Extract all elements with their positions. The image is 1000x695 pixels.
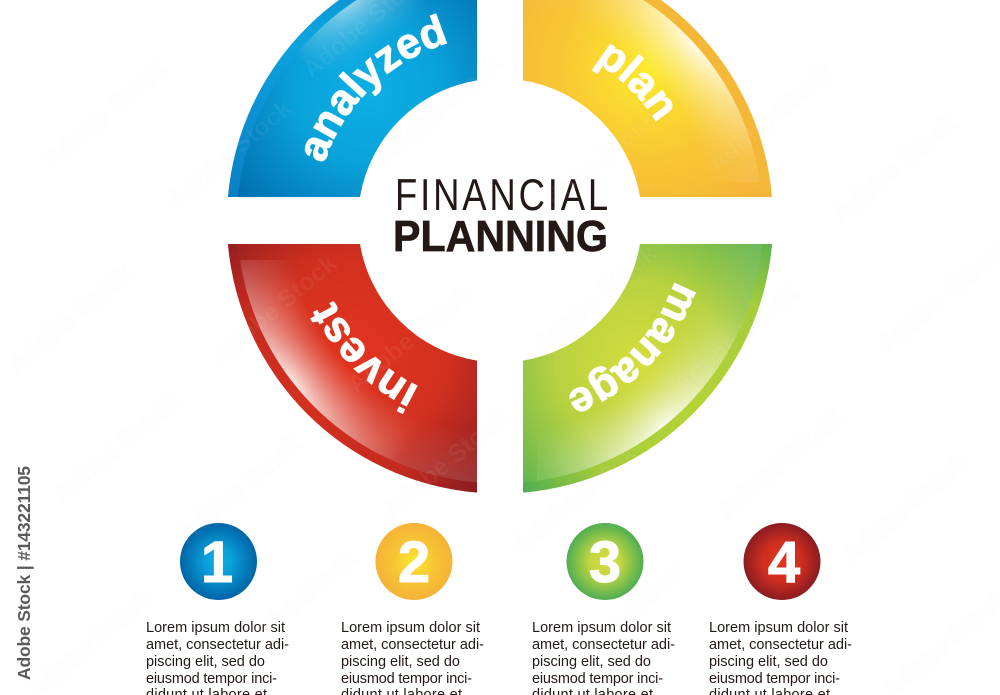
watermark: stock pattern: Adobe Stock (827, 109, 962, 229)
panel: invest segment (228, 244, 477, 492)
watermark: stock pattern: Adobe Stock (667, 279, 802, 399)
title (393, 170, 608, 261)
watermark: stock pattern: Adobe Stock (162, 94, 297, 214)
text block: step 1: eiusmod tempor inci- (146, 671, 277, 687)
label: plan: plan (592, 43, 673, 122)
step 3 (532, 523, 675, 695)
text block: step 2: Lorem ipsum dolor sit (341, 620, 480, 636)
icon: number 2 badge: 2 (398, 530, 430, 595)
watermark: stock pattern: Adobe Stock (207, 249, 342, 369)
icon: number 2 badge (376, 523, 452, 600)
watermark: stock pattern: Adobe Stock (37, 54, 172, 174)
text block: step 4: eiusmod tempor inci- (709, 671, 840, 687)
step 2 (341, 523, 484, 695)
text block: step 2: eiusmod tempor inci- (341, 671, 472, 687)
watermark: stock pattern: Adobe Stock (712, 404, 847, 524)
label: analyzed: analyzed (304, 13, 448, 162)
text block: step 1: amet, consectetur adi- (146, 637, 289, 653)
watermark: stock pattern: Adobe Stock (552, 559, 687, 679)
text block: step 3: eiusmod tempor inci- (532, 671, 663, 687)
panel: manage segment (523, 244, 772, 492)
text block: step 1 (146, 620, 289, 695)
label: invest: invest (310, 301, 418, 414)
text block: step 2: amet, consectetur adi- (341, 637, 484, 653)
icon: number 4 badge (744, 523, 820, 600)
watermark: stock pattern: Adobe Stock (527, 104, 662, 224)
label: manage: manage (569, 282, 696, 412)
watermark: stock pattern: Adobe Stock (342, 279, 477, 399)
icon: number 1 badge: 1 (201, 530, 233, 595)
icon: number 1 badge (180, 523, 257, 600)
watermark: stock pattern: Adobe Stock (377, 404, 512, 524)
text block: step 1: Lorem ipsum dolor sit (146, 620, 285, 636)
panel: plan segment (523, 0, 772, 197)
text block: step 3: Lorem ipsum dolor sit (532, 620, 671, 636)
icon: number 3 badge: 3 (589, 530, 621, 595)
text block: step 3: amet, consectetur adi- (532, 637, 675, 653)
icon: number 3 badge (566, 523, 644, 600)
title: PLANNING (393, 212, 608, 261)
watermark: stock pattern: Adobe Stock (507, 439, 642, 559)
title: FINANCIAL (395, 170, 608, 220)
watermark: stock pattern: Adobe Stock (47, 389, 182, 509)
text block: step 3 (532, 620, 675, 695)
watermark: stock pattern: Adobe Stock (2, 259, 137, 379)
icon: number 4 badge: 4 (768, 530, 800, 595)
text block: step 1: piscing elit, sed do (146, 654, 265, 670)
text block: step 2: piscing elit, sed do (341, 654, 460, 670)
credit: vertical stock id: Adobe Stock | #143221105 (14, 466, 34, 680)
watermark: stock pattern: Adobe Stock (702, 59, 837, 179)
text block: step 4: Lorem ipsum dolor sit (709, 620, 848, 636)
watermark: stock pattern: Adobe Stock (172, 429, 307, 549)
text block: step 4: amet, consectetur adi- (709, 637, 852, 653)
text block: step 3: piscing elit, sed do (532, 654, 651, 670)
text block: step 4: piscing elit, sed do (709, 654, 828, 670)
watermark: stock pattern: Adobe Stock (372, 49, 507, 169)
text block: step 4 (709, 620, 852, 695)
watermark: stock pattern: Adobe Stock (227, 544, 362, 664)
panel: analyzed segment (228, 0, 477, 197)
step 4 (709, 523, 852, 695)
step 1 (146, 523, 289, 695)
watermark: stock pattern: Adobe Stock (837, 449, 972, 569)
watermark: stock pattern: Adobe Stock (527, 239, 662, 359)
text block: step 2 (341, 620, 484, 695)
